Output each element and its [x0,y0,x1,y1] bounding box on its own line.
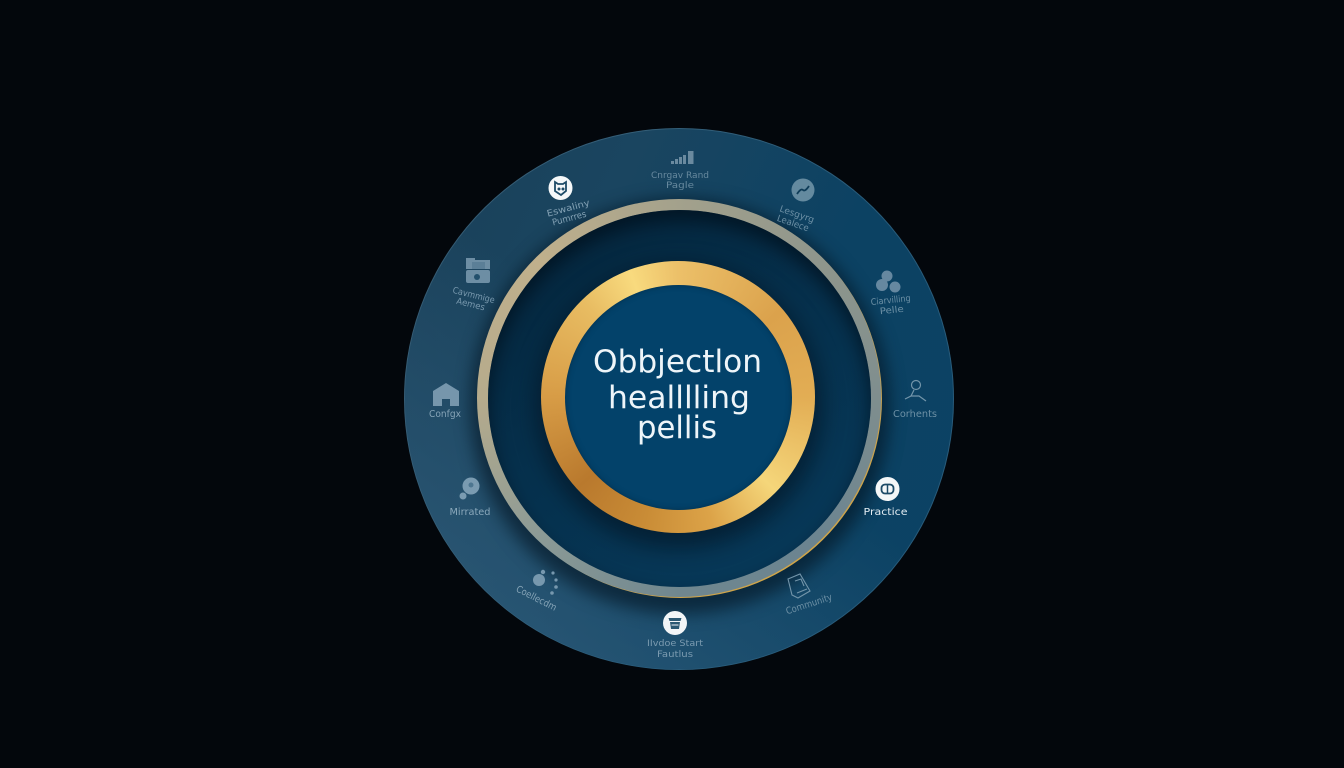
icon: pin dots [460,478,480,500]
icon: three dots [876,270,900,292]
segment: bottom: IIvdoe Start [647,639,703,649]
segment: mirrated: Mirrated [450,507,490,518]
panel: inner dark disc [488,210,871,587]
icon: white cup badge [663,611,687,635]
icon: hand and dots [533,570,558,595]
icon: folder [466,258,490,283]
title: pellis [637,410,717,446]
segment: upper left [546,176,592,228]
segment: config: Confgx [429,409,461,420]
panel: centre circle [565,285,792,510]
segment: top: Cnrgav Rand [651,171,709,181]
icon: house [433,383,459,406]
icon: white cat badge [548,176,572,200]
segment: right upper: Ciarvilling [870,294,911,308]
title: healllling [608,380,750,416]
ring shadow [470,198,890,614]
gold edge of ring [479,200,882,598]
segment: community [785,574,834,617]
title: Obbjectlon [593,344,762,380]
icon: signal bars [671,151,694,164]
segment: right upper: Pelle [879,305,905,317]
title [593,344,762,446]
segment: top: Pagle [666,181,695,191]
gold ring shadow [536,264,822,548]
segment: config [429,383,461,420]
segment: left upper: Cavmmige [451,286,496,306]
segment: top [651,151,709,191]
icon: white badge [876,477,900,501]
icon: person node [905,380,926,401]
segment: collection: Coellecdm [514,584,558,614]
segment: bottom: Fautlus [657,650,693,660]
panel: outer wheel disc [404,128,954,670]
gold ring [541,261,815,533]
segment: collection [514,570,558,614]
segment: left upper [451,258,496,313]
segment: left upper: Aemes [455,297,486,313]
segment: contents: Corhents [893,409,937,420]
segment: upper right [775,178,815,234]
segment: upper right: Lealece [775,214,810,234]
segment: mirrated [450,478,490,518]
segment: bottom [647,611,703,660]
segment: practice [864,477,908,518]
segment: practice: Practice [864,507,908,518]
lower left disc tint [405,129,953,669]
segment: upper left: Pumrres [551,210,588,228]
icon: round badge [792,178,814,202]
metallic ring [477,199,881,597]
segment: upper left: Eswaliny [546,198,592,220]
segment: upper right: Lesgyrg [778,205,815,226]
segment: contents [893,380,937,420]
icon: outlined card [788,574,810,598]
segment: right upper [870,270,911,317]
segment: community: Community [785,592,834,617]
